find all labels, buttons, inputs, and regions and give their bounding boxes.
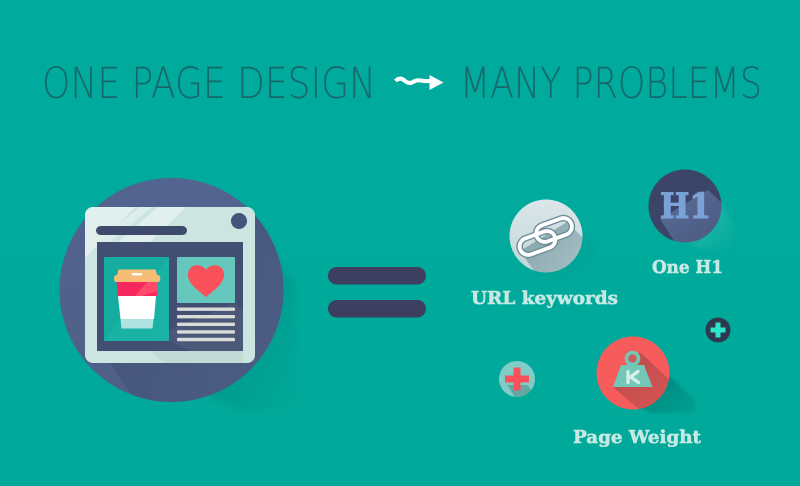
frame shadow from content [150,351,243,363]
long shadow outside circle [210,235,296,412]
image panel [177,257,235,303]
content shadow [169,303,243,351]
window glare [85,207,186,258]
window frame [85,207,255,363]
content area [97,242,243,351]
label: Page Weight: Page Weight [573,427,702,448]
icon: squiggly arrow [396,75,444,90]
title left: one page design: ONE PAGE DESIGN [42,59,376,109]
label: URL keywords: URL keywords [471,288,618,309]
title [42,59,762,109]
icon: dark plus [706,318,730,342]
equals sign [328,267,426,318]
window long shadow [110,216,284,402]
icon: coffee cup [114,270,160,328]
icon: page weight circle [596,336,695,413]
text lines [177,308,235,341]
window button [231,213,247,229]
teal panel [104,257,169,341]
icon: red plus [499,361,535,397]
icon: link circle [510,200,582,272]
label: One H1: One H1 [652,257,723,278]
large navy circle [60,178,284,402]
icon: heart [188,265,224,297]
icon: H1 circle: H1 [660,186,711,227]
icon: H1 circle [648,170,733,250]
icon: browser window illustration [60,178,293,406]
address bar [96,226,187,235]
